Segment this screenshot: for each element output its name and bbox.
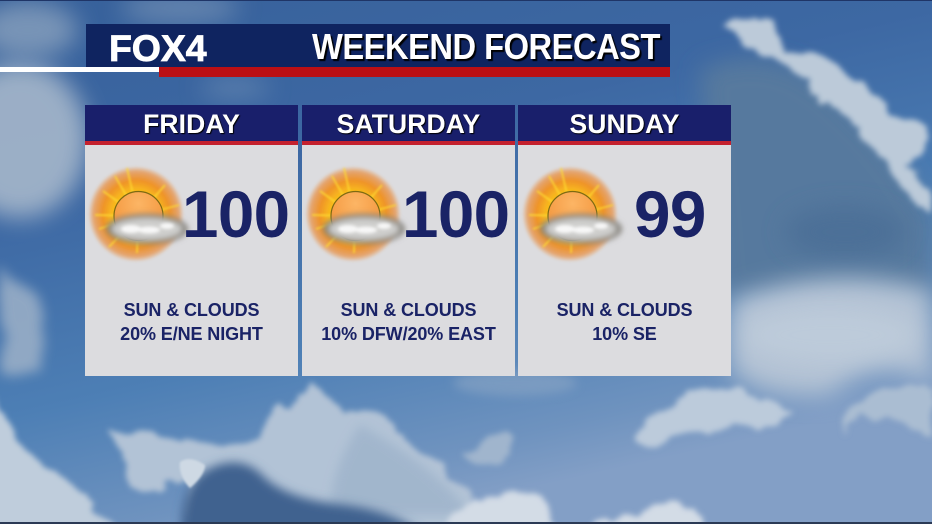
right cloud mass bbox=[700, 59, 932, 300]
title banner bbox=[0, 24, 670, 77]
frame lines bbox=[0, 0, 932, 1]
forecast text: 10% DFW/20% EAST bbox=[321, 324, 496, 344]
temperature: 100 bbox=[182, 178, 289, 251]
forecast text bbox=[321, 300, 496, 344]
banner navy bar bbox=[86, 24, 670, 67]
forecast text: SUN & CLOUDS bbox=[341, 300, 476, 320]
panel: Sunday bbox=[518, 105, 731, 376]
forecast text: SUN & CLOUDS bbox=[557, 300, 692, 320]
right lower clouds bbox=[636, 389, 792, 448]
panel: Friday bbox=[85, 105, 298, 376]
day heading bbox=[85, 105, 298, 145]
day heading bbox=[518, 105, 731, 145]
panel: Saturday bbox=[302, 105, 515, 376]
forecast text bbox=[557, 300, 692, 344]
heading: weekend forecast: WEEKEND FORECAST bbox=[312, 26, 660, 67]
day heading: SATURDAY bbox=[337, 109, 480, 139]
icon: sun and clouds bbox=[304, 166, 408, 262]
day heading: SUNDAY bbox=[569, 109, 680, 139]
forecast text: 10% SE bbox=[592, 324, 657, 344]
forecast text bbox=[120, 300, 263, 344]
bottom puffs bbox=[438, 490, 575, 524]
top-left haze bbox=[0, 62, 88, 218]
day heading: FRIDAY bbox=[143, 109, 240, 139]
bottom left cloud bbox=[0, 400, 130, 524]
white accent line bbox=[0, 67, 159, 72]
temperature: 99 bbox=[634, 178, 706, 251]
central cumulus bbox=[108, 388, 500, 524]
day heading bbox=[302, 105, 515, 145]
forecast text: 20% E/NE NIGHT bbox=[120, 324, 263, 344]
red accent bar bbox=[159, 67, 670, 77]
icon: sun and clouds bbox=[522, 166, 626, 262]
icon: sun and clouds bbox=[88, 166, 192, 262]
temperature: 100 bbox=[402, 178, 509, 251]
logo: FOX 4: FOX4 bbox=[109, 27, 207, 69]
forecast text: SUN & CLOUDS bbox=[124, 300, 259, 320]
